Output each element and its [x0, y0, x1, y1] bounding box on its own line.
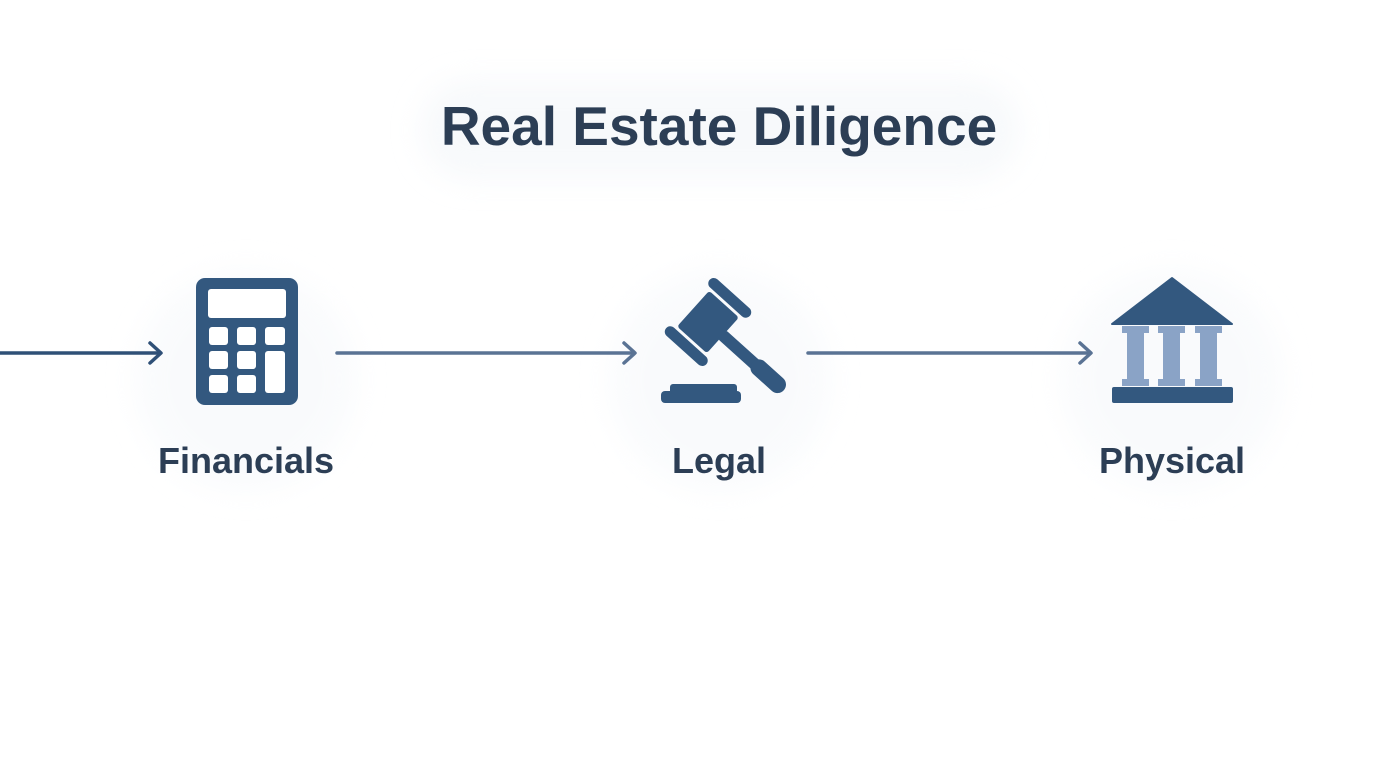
label: Legal: Legal	[672, 440, 766, 481]
icon: building	[1112, 278, 1233, 403]
arrow: financials to legal	[337, 343, 635, 363]
arrow: legal to physical	[808, 343, 1091, 363]
icon: calculator	[196, 278, 298, 405]
title: Real Estate Diligence	[441, 95, 997, 157]
icon: gavel	[661, 276, 809, 418]
label: Financials: Financials	[158, 440, 334, 481]
arrow: incoming	[0, 343, 161, 363]
label: Physical: Physical	[1099, 440, 1245, 481]
